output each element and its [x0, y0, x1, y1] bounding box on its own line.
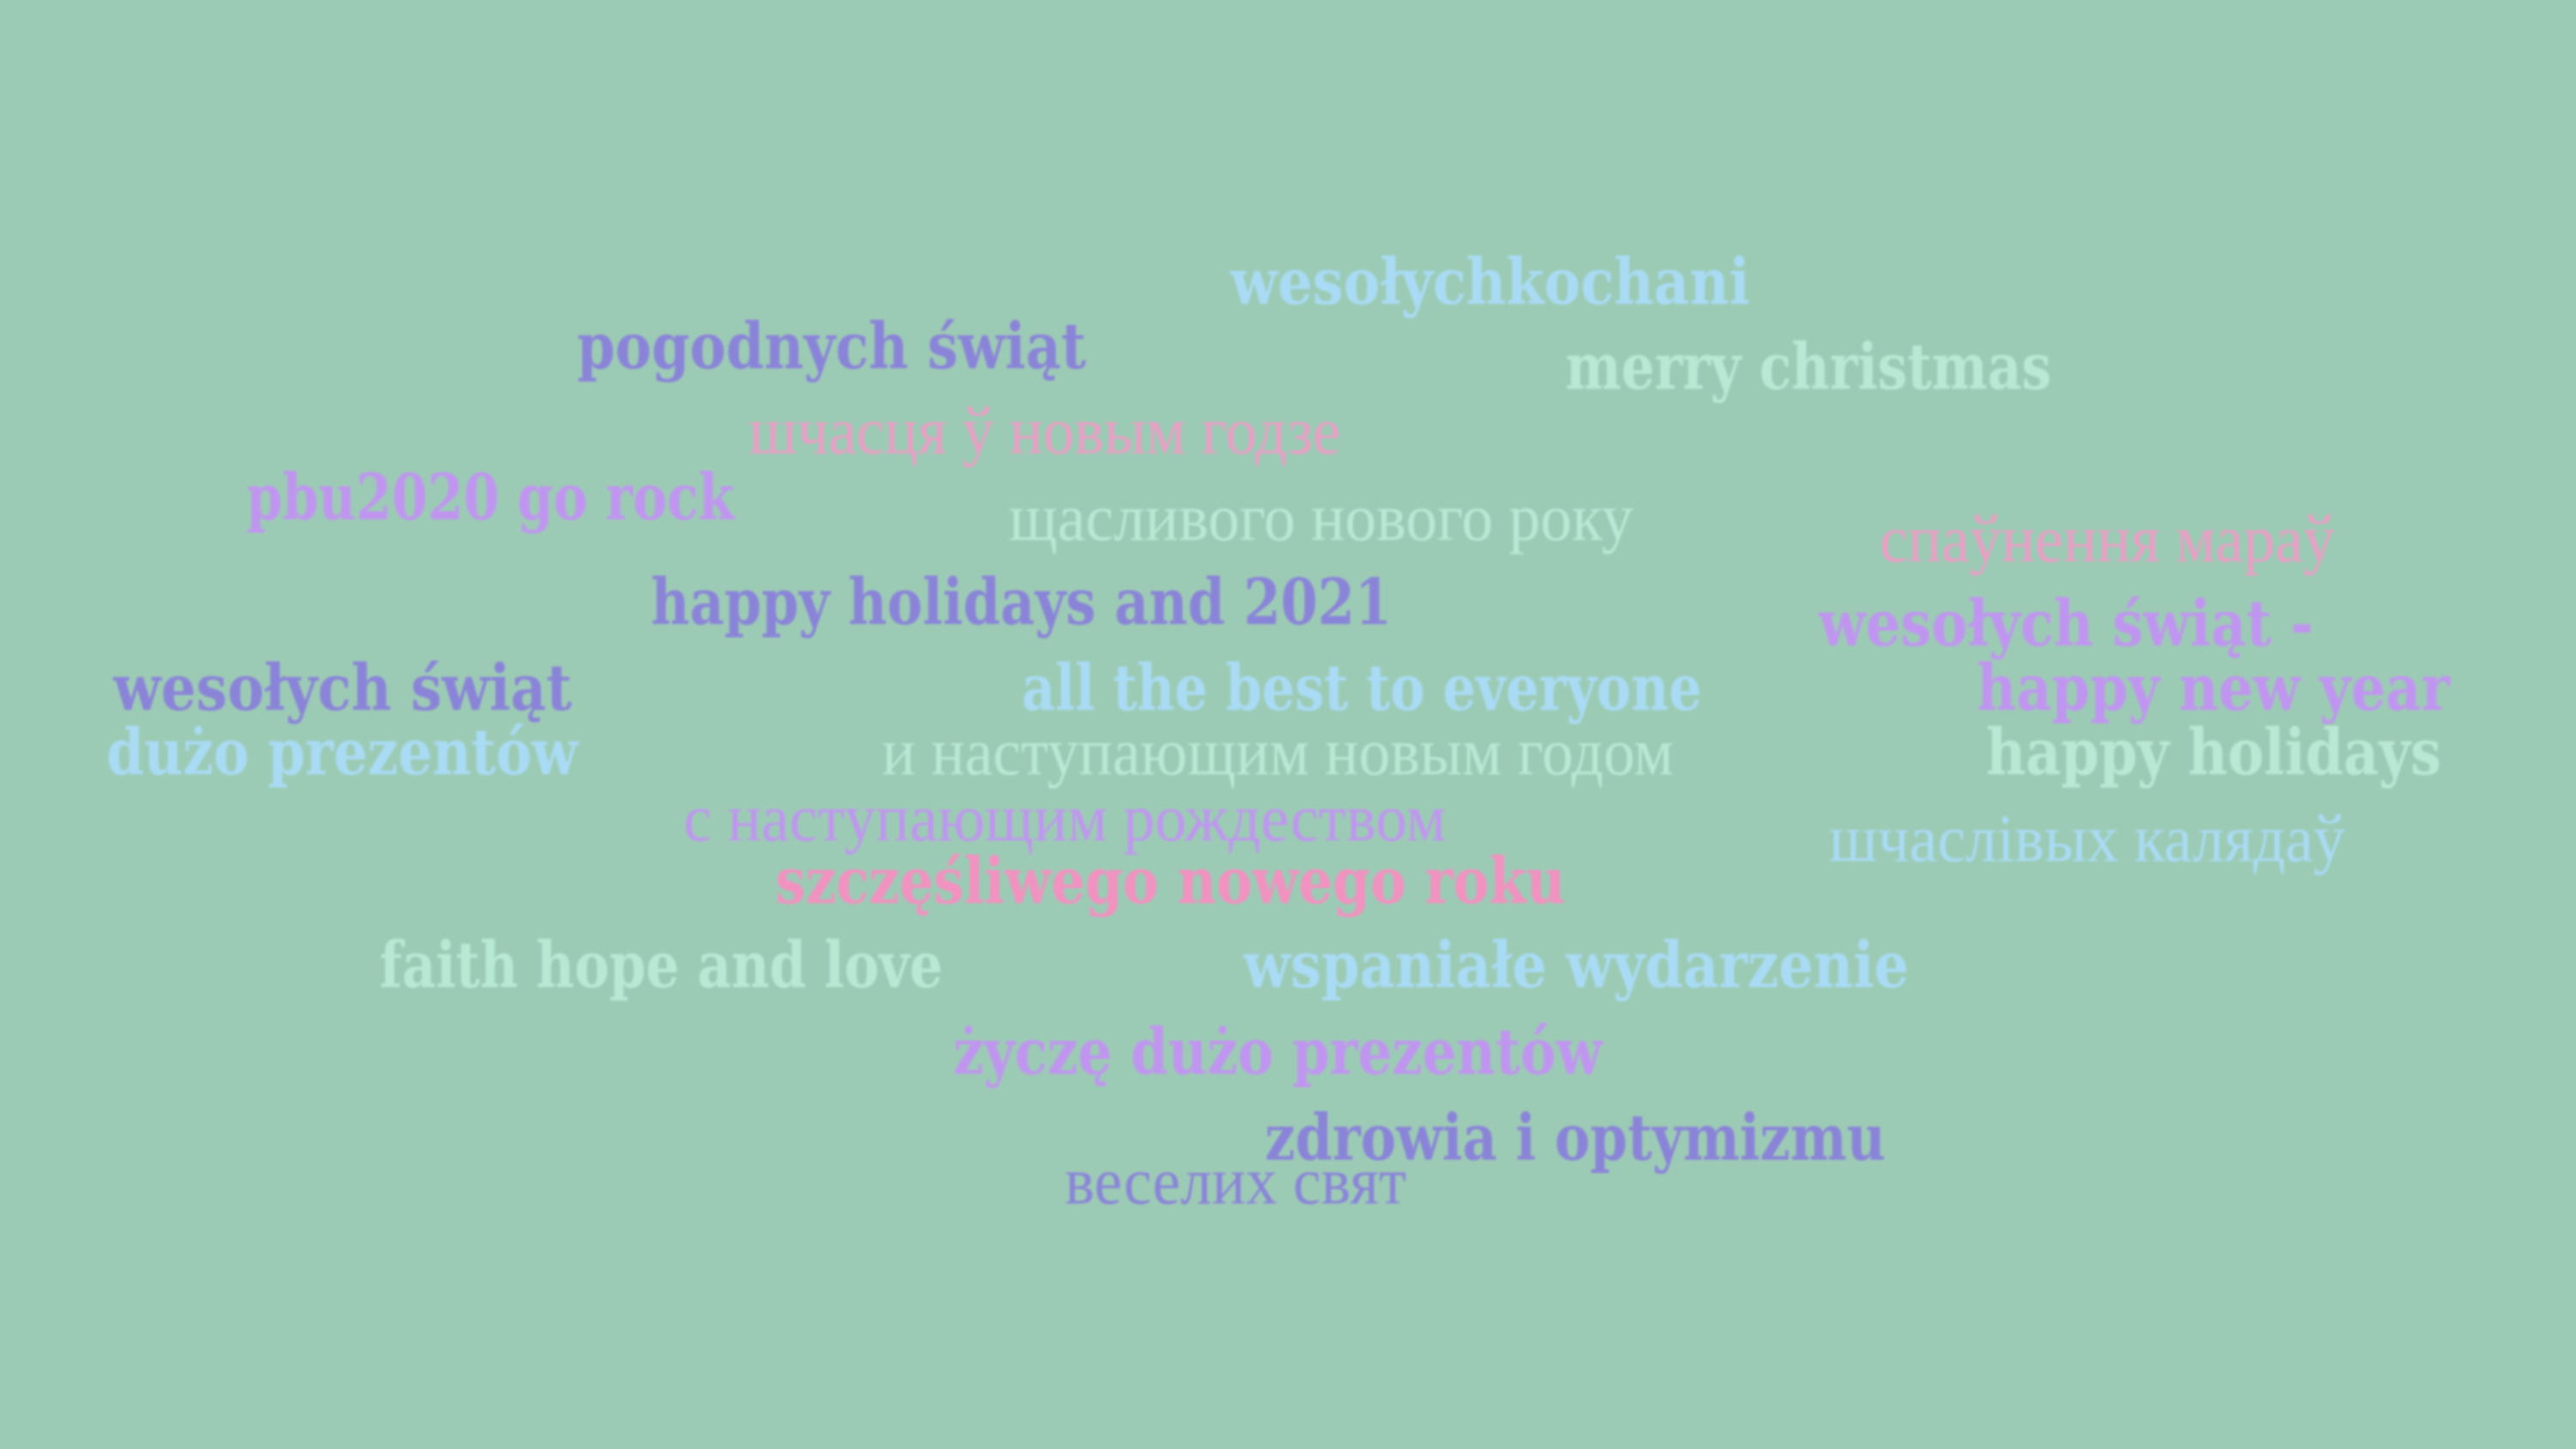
phrase: шчаслівых калядаў: шчаслівых калядаў [1829, 801, 2345, 876]
phrase: wesołych świąt: wesołych świąt [112, 652, 572, 725]
phrase: шчасця ў новым годзе: шчасця ў новым годзе [749, 393, 1340, 468]
phrase: wesołych świąt -: wesołych świąt - [1818, 587, 2313, 661]
phrase: faith hope and love: faith hope and love [380, 929, 943, 1003]
phrase: wesołychkochani: wesołychkochani [1230, 246, 1750, 319]
phrase: с наступающим рождеством: с наступающим рождеством [683, 780, 1446, 855]
phrase: pbu2020 go rock: pbu2020 go rock [246, 461, 735, 535]
phrase: спаўнення мараў: спаўнення мараў [1880, 501, 2335, 576]
phrase: happy new year: happy new year [1977, 652, 2451, 725]
phrase: pogodnych świąt: pogodnych świąt [577, 310, 1086, 384]
phrase: и наступающим новым годом: и наступающим новым годом [882, 714, 1674, 789]
phrase: веселих свят: веселих свят [1065, 1143, 1406, 1218]
phrase: щасливого нового року: щасливого нового року [1009, 480, 1633, 555]
phrase: all the best to everyone: all the best to everyone [1022, 652, 1702, 725]
phrase: dużo prezentów: dużo prezentów [106, 716, 580, 790]
phrase: merry christmas: merry christmas [1565, 330, 2051, 404]
phrase: życzę dużo prezentów: życzę dużo prezentów [953, 1016, 1604, 1089]
phrase: szczęśliwego nowego roku: szczęśliwego nowego roku [775, 845, 1565, 919]
phrase: zdrowia i optymizmu: zdrowia i optymizmu [1265, 1101, 1886, 1175]
phrase: happy holidays and 2021: happy holidays and 2021 [651, 566, 1392, 640]
word cloud phrases [106, 246, 2451, 1218]
phrase: wspaniałe wydarzenie: wspaniałe wydarzenie [1242, 929, 1909, 1003]
phrase: happy holidays: happy holidays [1986, 716, 2441, 790]
